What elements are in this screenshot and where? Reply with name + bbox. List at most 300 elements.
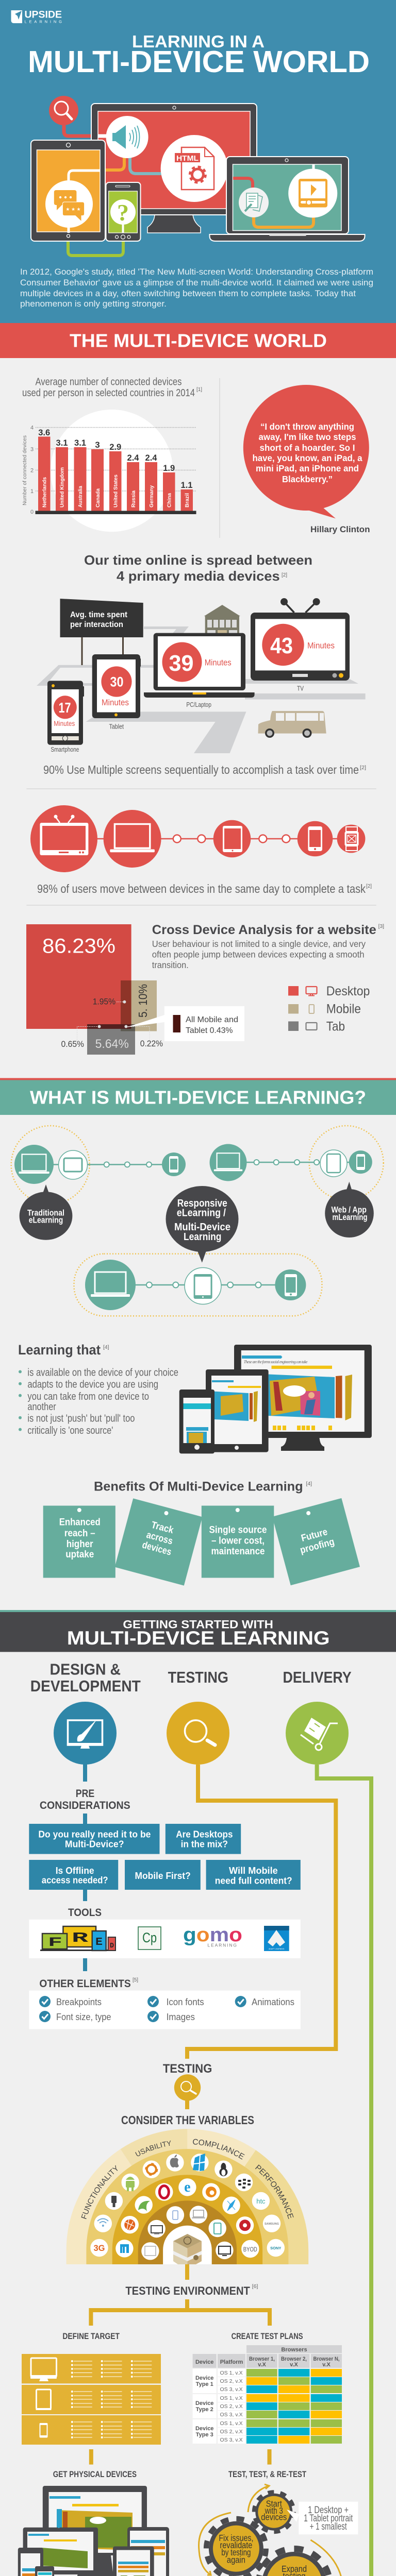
device chain: red	[30, 805, 365, 872]
bar labels: Netherlands	[41, 477, 47, 507]
title: MULTI-DEVICE WORLD	[28, 45, 370, 79]
panel: create test plans table: OS 3, v.X	[220, 2386, 243, 2393]
icon: phone	[298, 821, 333, 856]
icons: outer ring network and OS: SONY	[270, 2246, 281, 2250]
chart: cross device overlap: 0.65%	[61, 1039, 84, 1049]
panel: create test plans table: OS 3, v.X	[220, 2437, 243, 2443]
heading: time online	[84, 552, 312, 584]
ring labels: USABILITY	[135, 2140, 171, 2157]
logo: FRED: D	[110, 1942, 114, 1950]
text: cross device analysis: User behaviour is not limited to a single device, and very	[152, 939, 366, 949]
icons: middle ring browsers: e	[184, 2179, 191, 2195]
connector: testing branches	[91, 2264, 270, 2465]
ring labels: COMPLIANCE	[193, 2139, 244, 2160]
icon: monitor and brush	[67, 1719, 103, 1749]
logo: FRED: E	[95, 1937, 103, 1948]
callout: start devices: + 1 smallest	[310, 2521, 347, 2532]
panel: create test plans table: Browsers	[281, 2347, 307, 2353]
icons: outer ring network and OS: 3G	[94, 2243, 105, 2253]
connector: testing path	[187, 1765, 336, 2059]
card: single source: – lower cost,	[211, 1535, 265, 1546]
gear: fix issues: revalidate	[220, 2540, 252, 2550]
logo: LEARNING	[25, 20, 62, 24]
bar labels: Russia	[130, 490, 137, 507]
bar chart: connected devices per person	[22, 376, 202, 532]
diagram: traditional elearning	[11, 1126, 186, 1240]
bubble: traditional elearning: Traditional	[27, 1208, 64, 1218]
text: cross device analysis: often people jump between devices expecting a smooth	[152, 950, 365, 960]
chart: cross device overlap: 1.95%	[93, 997, 116, 1007]
panel: define target	[22, 2331, 161, 2445]
illustration: responsive devices	[31, 96, 365, 256]
tv: Minutes	[307, 641, 335, 651]
section: other elements: Icon fonts	[167, 1997, 204, 2007]
text: cross device analysis: transition.	[152, 960, 189, 970]
legend: Desktop	[326, 984, 370, 998]
panel: create test plans table: Device	[195, 2400, 213, 2406]
section: pre considerations: Is Offline	[56, 1865, 94, 1876]
panel: hero	[0, 0, 396, 323]
column: testing: TESTING	[168, 1668, 228, 1686]
bar chart: connected devices per person: 3	[30, 446, 34, 452]
panel: create test plans table: OS 2, v.X	[220, 2429, 243, 2435]
card: future proofing: Future	[300, 1527, 328, 1544]
callout: start devices: 1 Tablet portrait	[304, 2513, 353, 2524]
text: learning that: you can take from one device to	[27, 1391, 149, 1402]
icons: outer ring network and OS	[90, 2154, 285, 2257]
section: pre considerations: Mobile First?	[135, 1870, 191, 1881]
section: pre considerations: Are Desktops	[176, 1828, 233, 1839]
logo: captivate	[138, 1927, 161, 1950]
column: testing	[167, 1668, 229, 1765]
text: cross device analysis: Cross Device Analysis for a website	[152, 923, 376, 937]
bar chart: connected devices per person: 2	[30, 468, 34, 474]
bar labels: Canada	[95, 488, 101, 507]
phone	[179, 1389, 214, 1453]
bar chart: connected devices per person: Number of connected devices	[22, 435, 28, 505]
heading: testing environment: [6]	[252, 2284, 258, 2290]
icon: tablet	[36, 2389, 52, 2410]
section: pre considerations: Will Mobile	[229, 1865, 278, 1876]
monitor	[234, 1345, 372, 1451]
stat: 98 percent: [2]	[366, 884, 372, 889]
diagram: responsive elearning	[74, 1186, 322, 1316]
section: other elements: Breakpoints	[56, 1997, 102, 2007]
smartphone	[106, 182, 140, 241]
column: design and development: DEVELOPMENT	[30, 1677, 141, 1695]
icon: monitor	[30, 2358, 57, 2381]
monitor: These are the forms social engineering can take	[244, 1360, 308, 1364]
heading: testing environment: TESTING ENVIRONMENT	[125, 2284, 250, 2297]
chart: cross device overlap: 5. 10%	[136, 984, 150, 1018]
diagram: testing variables dome	[66, 2129, 308, 2264]
text: learning that: [4]	[103, 1345, 109, 1350]
icon: central package	[173, 2234, 202, 2264]
smartphone: 17	[59, 700, 71, 716]
heading: time online: [2]	[282, 572, 287, 578]
callout: Tablet 0.43%	[186, 1026, 233, 1035]
logo: FRED: F	[48, 1935, 62, 1950]
icon: HTML document bubble: HTML	[176, 154, 199, 163]
stat: 90 percent: [2]	[360, 765, 366, 771]
bars	[38, 437, 193, 511]
icons: outer ring network and OS: htc	[256, 2197, 266, 2205]
sign: avg time spent: per interaction	[70, 620, 123, 629]
chart title: [1]	[196, 387, 202, 393]
text: cross device analysis	[152, 923, 384, 970]
label: smartphone: Smartphone	[51, 746, 79, 753]
logo: adapt: ADAPT LEARNING	[269, 1948, 285, 1950]
text: learning that	[18, 1342, 178, 1436]
section head: testing	[163, 2062, 212, 2109]
heading: what is multi-device learning: WHAT IS MULTI-DEVICE LEARNING?	[30, 1087, 366, 1108]
text: learning that: is not just 'push' but 'pull' too	[27, 1413, 135, 1425]
bar labels: Brazil	[184, 493, 190, 507]
section: other elements: [5]	[133, 1977, 138, 1983]
bar labels: United Kingdom	[59, 467, 65, 507]
heading: what is multi-device learning	[0, 1078, 396, 1115]
panel: create test plans table: Browser 2,	[281, 2356, 307, 2362]
section: other elements: Font size, type	[56, 2012, 111, 2022]
chart: cross device overlap: 86.23%	[42, 935, 116, 958]
panel: get physical devices	[16, 2469, 169, 2576]
intro paragraph: multiple devices in a day, often switching between them to complete tasks. Today that	[20, 289, 356, 298]
text: cross device analysis: [3]	[378, 924, 384, 929]
panel: test test and re-test	[199, 2469, 358, 2576]
panel: create test plans table: OS 1, v.X	[220, 2395, 243, 2401]
intro paragraph	[20, 267, 373, 309]
section: pre considerations: Multi-Device?	[65, 1839, 124, 1850]
icon: video player bubble	[288, 169, 337, 217]
panel: create test plans table: CREATE TEST PLANS	[232, 2331, 303, 2341]
icon: documents bubble	[239, 188, 269, 217]
panel: create test plans table: OS 1, v.X	[220, 2370, 243, 2376]
tablet: 30	[110, 674, 124, 689]
intro paragraph: phenomenon is only getting stronger.	[20, 299, 167, 309]
logo: captivate: Cp	[142, 1930, 157, 1945]
bar values	[38, 428, 192, 490]
tablet: Minutes	[102, 698, 129, 707]
panel: create test plans table: OS 1, v.X	[220, 2420, 243, 2427]
flow connectors	[187, 1765, 371, 2576]
icon: magnifier bubble	[49, 96, 93, 136]
heading: getting started: GETTING STARTED WITH	[123, 1618, 273, 1631]
bar chart: connected devices per person: 1	[30, 488, 34, 495]
card: enhanced reach: Enhanced	[59, 1517, 101, 1528]
icon: tv	[30, 805, 97, 872]
gear: fix issues	[206, 2519, 266, 2576]
panel: create test plans table: v.X	[258, 2362, 267, 2368]
illustration: course on three devices	[179, 1345, 372, 1453]
text: learning that: Learning that	[18, 1342, 101, 1358]
bubble: web and app mlearning	[325, 1182, 374, 1238]
gear: fix issues: by testing	[221, 2547, 251, 2557]
column: delivery: DELIVERY	[283, 1668, 352, 1686]
intro paragraph: In 2012, Google's study, titled 'The New Multi-screen World: Understanding Cross-platform	[20, 267, 373, 277]
chart title: used per person in selected countries in 2014	[22, 387, 195, 399]
panel: define target: DEFINE TARGET	[62, 2331, 120, 2341]
panel: create test plans table: OS 3, v.X	[220, 2412, 243, 2418]
bar labels: China	[166, 493, 172, 507]
panel: create test plans table: v.X	[322, 2362, 331, 2368]
text: learning that: is available on the device of your choice	[27, 1367, 178, 1378]
section head: testing: TESTING	[163, 2062, 212, 2076]
chart title: Average number of connected devices	[35, 376, 182, 387]
sign: avg time spent: Avg. time spent	[70, 611, 128, 619]
legend: Mobile	[326, 1002, 361, 1016]
column: design and development	[30, 1660, 141, 1782]
icon: phone	[39, 2423, 47, 2438]
tablet	[92, 654, 141, 731]
bar values: 3	[95, 440, 100, 450]
smartphone	[47, 681, 84, 753]
card: enhanced reach	[43, 1505, 116, 1578]
icon: hand truck	[301, 1718, 338, 1750]
bar values: 3.1	[74, 438, 86, 448]
section: other elements: Images	[167, 2012, 195, 2022]
text: learning that: another	[27, 1401, 56, 1413]
bar values: 3.1	[56, 438, 68, 448]
bubble: web and app mlearning: Web / App	[331, 1205, 367, 1215]
bubble: responsive multi-device learning: Multi-Device	[174, 1222, 230, 1233]
diagram: web and app mlearning	[209, 1126, 384, 1238]
bar labels	[41, 467, 190, 507]
icon: HTML document bubble	[161, 135, 228, 202]
tv: 43	[270, 633, 293, 658]
monitor	[43, 2486, 147, 2576]
card: enhanced reach: uptake	[65, 1549, 94, 1560]
icons: inner ring devices	[141, 2206, 234, 2260]
bubble: web and app mlearning: mLearning	[332, 1212, 367, 1222]
tablet	[31, 140, 105, 241]
icons: outer ring network and OS: SAMSUNG	[265, 2223, 279, 2226]
tablet right	[127, 2527, 169, 2576]
panel: create test plans table: OS 2, v.X	[220, 2378, 243, 2384]
intro paragraph: Consumer Behavior' gave us a glimpse of the multi-device world. It claimed we were using	[20, 278, 373, 287]
section: pre considerations: Do you really need it to be	[38, 1828, 151, 1839]
sign: avg time spent	[60, 599, 143, 665]
ring labels: FUNCTIONALITY	[81, 2165, 118, 2219]
logo: FRED	[40, 1926, 116, 1951]
section: other elements	[29, 1977, 301, 2029]
quote bubble: have, you know, an iPad, a	[253, 453, 362, 463]
quote bubble: “I don't throw anything	[260, 421, 354, 432]
icon: watch	[337, 825, 365, 853]
gear: fix issues: again	[227, 2555, 245, 2565]
card: track across devices: Track	[150, 1520, 175, 1536]
bar values: 2.4	[145, 453, 157, 463]
illustration: time per device city	[37, 598, 366, 753]
panel: create test plans table: Device	[195, 2359, 213, 2365]
icon: chat bubbles	[54, 190, 85, 222]
icon: magnifier	[185, 1720, 215, 1745]
quote bubble: Blackberry.”	[282, 474, 333, 484]
label: laptop: PC/Laptop	[186, 701, 211, 708]
section: tools	[29, 1906, 301, 1958]
heading: time online: 4 primary media devices	[117, 568, 280, 584]
title: LEARNING IN A	[132, 32, 265, 51]
bar labels: Germany	[148, 485, 155, 507]
section: other elements: Animations	[252, 1997, 294, 2007]
ring labels	[81, 2139, 294, 2219]
gear: start with 3 devices: with 3	[265, 2505, 283, 2516]
logo: gomo: LEARNING	[207, 1943, 237, 1948]
connector: tablet to phone	[68, 242, 123, 256]
logo	[11, 9, 62, 24]
label: tv: TV	[297, 685, 304, 692]
bubble: traditional elearning: eLearning	[29, 1215, 63, 1225]
panel: create test plans table: Type 3	[196, 2432, 213, 2438]
callout: start devices	[287, 2502, 358, 2534]
roads	[37, 626, 366, 753]
smartphone: Minutes	[54, 719, 75, 727]
quote bubble: away, I'm like two steps	[259, 432, 356, 442]
section: pre considerations: PRE	[76, 1787, 94, 1800]
card: single source: Single source	[209, 1525, 267, 1536]
logo: FRED: R	[72, 1931, 89, 1946]
panel: create test plans table: Platform	[220, 2359, 243, 2365]
laptop	[209, 157, 365, 241]
panel: create test plans table: Browser 1,	[249, 2356, 275, 2362]
heading: benefits: [4]	[306, 1481, 312, 1487]
ring labels: PERFORMANCE	[255, 2164, 294, 2219]
bus	[258, 711, 326, 738]
panel: create test plans table: Device	[195, 2426, 213, 2432]
tv	[251, 598, 350, 692]
bubble: responsive multi-device learning: Responsive	[177, 1198, 227, 1209]
lists	[74, 2361, 152, 2437]
icons: middle ring browsers: BYOD	[243, 2246, 257, 2253]
bar values: 2.4	[127, 453, 139, 463]
cycle arrows	[199, 2484, 343, 2576]
logo: adapt	[264, 1926, 289, 1951]
tablet front	[113, 2546, 154, 2576]
quote bubble: short of a hoarder. So I	[260, 443, 355, 453]
bar chart: connected devices per person: 4	[30, 425, 34, 431]
heading: consider the variables: CONSIDER THE VARIABLES	[121, 2113, 254, 2127]
panel: test test and re-test: TEST, TEST, & RE-TEST	[228, 2469, 306, 2479]
chart: cross device overlap: 5.64%	[95, 1037, 129, 1051]
panel: create test plans table: Browser N,	[314, 2356, 339, 2362]
panel: create test plans table: OS 2, v.X	[220, 2403, 243, 2410]
panel: create test plans table: Device	[195, 2375, 213, 2381]
gear: start with 3 devices: devices	[261, 2512, 287, 2522]
legend: Tab	[326, 1020, 345, 1034]
bubble: responsive multi-device learning	[166, 1186, 238, 1263]
quote attribution: Hillary Clinton	[310, 524, 370, 534]
chart: cross device overlap	[26, 924, 244, 1055]
bubble: responsive multi-device learning: eLearning /	[177, 1208, 226, 1219]
chart title	[22, 376, 202, 399]
gear: expand testing: Expand	[282, 2564, 307, 2574]
desktop monitor	[91, 104, 257, 233]
column: delivery	[283, 1668, 352, 1765]
icon: speaker bubble	[106, 116, 148, 158]
icon: chat bubbles: ★ ★ ★	[65, 207, 81, 212]
section: pre considerations: in the mix?	[181, 1839, 228, 1850]
gear: start with 3 devices	[254, 2492, 294, 2532]
text: learning that: critically is 'one source'	[27, 1425, 113, 1436]
icon: tablet	[213, 820, 251, 857]
benefit cards	[43, 1498, 360, 1586]
gear: start with 3 devices: Start	[266, 2499, 282, 2509]
section: pre considerations	[29, 1787, 301, 1971]
callout: All Mobile and	[186, 1015, 238, 1024]
column: design and development: DESIGN &	[50, 1660, 121, 1679]
house	[204, 605, 240, 634]
bar labels: Australia	[77, 486, 84, 507]
card: enhanced reach: reach –	[64, 1528, 95, 1539]
section: other elements: OTHER ELEMENTS	[39, 1977, 131, 1990]
heading: time online: Our time online is spread between	[84, 552, 312, 568]
gear: fix issues: Fix issues,	[219, 2533, 253, 2543]
card: single source: maintenance	[211, 1546, 265, 1557]
laptop: 39	[169, 651, 194, 676]
quote bubble	[243, 385, 370, 534]
chart: cross device overlap: 0.22%	[140, 1039, 163, 1048]
card: enhanced reach: higher	[67, 1539, 93, 1550]
bubble: responsive multi-device learning: Learning	[184, 1231, 221, 1243]
card: future proofing	[272, 1498, 360, 1585]
connector: delivery path	[198, 1765, 371, 2576]
tablet	[206, 1369, 269, 1452]
text: learning that: adapts to the device you are using	[27, 1379, 158, 1391]
panel: create test plans table	[193, 2331, 342, 2444]
bubble: traditional elearning	[20, 1184, 72, 1240]
logo: gomo: gomo	[183, 1924, 242, 1946]
heading: the multi-device world: THE MULTI-DEVICE WORLD	[70, 330, 327, 351]
gear: expand testing	[259, 2549, 330, 2576]
heading: getting started	[0, 1610, 396, 1652]
card: track across devices: devices	[141, 1539, 173, 1558]
heading: benefits: Benefits Of Multi-Device Learning	[94, 1480, 303, 1494]
bar values: 1.1	[180, 480, 193, 490]
heading: the multi-device world	[0, 323, 396, 358]
phone front	[35, 2566, 54, 2576]
section: pre considerations: access needed?	[42, 1875, 108, 1886]
bar values: 3.6	[38, 428, 50, 437]
card: track across devices	[115, 1498, 202, 1586]
logo: UPSIDE	[25, 9, 62, 21]
panel: create test plans table: v.X	[290, 2362, 299, 2368]
bar labels: United States	[112, 474, 119, 507]
legend	[288, 984, 370, 1034]
laptop	[16, 2526, 105, 2576]
panel: create test plans table: Type 1	[196, 2381, 213, 2387]
panel: get physical devices: GET PHYSICAL DEVICES	[53, 2469, 137, 2479]
callout: start devices: 1 Desktop +	[308, 2505, 349, 2516]
card: single source	[202, 1505, 274, 1578]
icons: middle ring browsers	[116, 2178, 259, 2258]
laptop: Minutes	[205, 657, 232, 668]
smartphone: ?	[117, 199, 129, 226]
bar values: 1.9	[163, 463, 175, 473]
laptop	[144, 633, 255, 708]
quote bubble: mini iPad, an iPhone and	[256, 463, 359, 473]
callout	[126, 1006, 244, 1041]
phone left	[18, 2548, 43, 2576]
label: tablet: Tablet	[109, 723, 124, 731]
icon: laptop	[104, 810, 161, 868]
section: tools: TOOLS	[68, 1906, 102, 1919]
card: track across devices: across	[145, 1530, 174, 1547]
heading: getting started: MULTI-DEVICE LEARNING	[67, 1628, 330, 1649]
panel: create test plans table: Type 2	[196, 2406, 213, 2413]
card: future proofing: proofing	[299, 1536, 336, 1556]
bar values: 2.9	[109, 442, 121, 452]
section: pre considerations: need full content?	[215, 1875, 292, 1886]
section: pre considerations: CONSIDERATIONS	[40, 1799, 130, 1811]
